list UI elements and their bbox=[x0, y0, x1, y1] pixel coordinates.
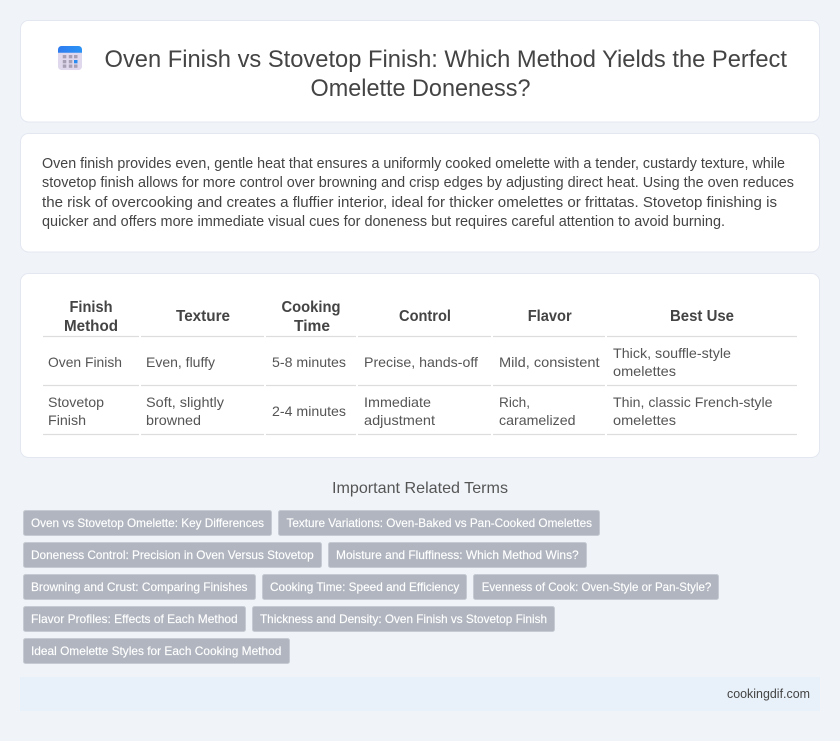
tag bbox=[24, 510, 272, 536]
tag bbox=[474, 574, 718, 600]
tag: Flavor Profiles: Effects of Each Method bbox=[31, 612, 238, 626]
tag: Browning and Crust: Comparing Finishes bbox=[31, 580, 248, 594]
title: Omelette Doneness? bbox=[310, 75, 530, 102]
table row: stovetop finish: Thin, classic French-style bbox=[613, 394, 773, 410]
tag: Texture Variations: Oven-Baked vs Pan-Cooked Omelettes bbox=[286, 516, 592, 530]
table row: stovetop finish: Rich, bbox=[499, 394, 530, 410]
panel: summary bbox=[20, 134, 820, 252]
table header: Flavor bbox=[528, 308, 572, 325]
table header: Time bbox=[294, 318, 330, 335]
table header: Cooking bbox=[282, 299, 340, 316]
tag: Oven vs Stovetop Omelette: Key Differences bbox=[31, 516, 264, 530]
footer bbox=[20, 677, 820, 711]
summary text: the risk of overcooking and creates a fluffier interior, ideal for thicker omelettes or frittatas. Stovetop finishing is bbox=[42, 195, 777, 211]
tag bbox=[24, 606, 246, 632]
table row: stovetop finish: omelettes bbox=[613, 412, 676, 428]
table row: stovetop finish bbox=[48, 394, 773, 428]
tag bbox=[278, 510, 600, 536]
summary text: Oven finish provides even, gentle heat that ensures a uniformly cooked omelette with a tender, custardy texture, while bbox=[42, 156, 785, 172]
table row: oven finish: Even, fluffy bbox=[146, 354, 215, 370]
table row: oven finish: Oven Finish bbox=[48, 354, 122, 370]
table row: stovetop finish: Immediate bbox=[364, 394, 431, 410]
tag: Moisture and Fluffiness: Which Method Wins? bbox=[336, 548, 579, 562]
title: Oven Finish vs Stovetop Finish: Which Method Yields the Perfect bbox=[104, 46, 787, 73]
table row: oven finish: Precise, hands-off bbox=[364, 354, 478, 370]
summary text bbox=[42, 156, 794, 230]
tag: Thickness and Density: Oven Finish vs Stovetop Finish bbox=[260, 612, 547, 626]
heading: related terms: Important Related Terms bbox=[332, 480, 508, 497]
table row: oven finish: omelettes bbox=[613, 363, 676, 379]
table row: stovetop finish: Soft, slightly bbox=[146, 394, 224, 410]
related term tags bbox=[24, 510, 718, 664]
table row: oven finish bbox=[48, 345, 731, 379]
table header: Texture bbox=[176, 308, 230, 325]
tag bbox=[24, 574, 256, 600]
tag: Cooking Time: Speed and Efficiency bbox=[270, 580, 459, 594]
table header bbox=[64, 299, 734, 335]
tag bbox=[252, 606, 554, 632]
table row: stovetop finish: Finish bbox=[48, 412, 86, 428]
table header: Method bbox=[64, 318, 118, 335]
table row: stovetop finish: adjustment bbox=[364, 412, 435, 428]
table row: stovetop finish: Stovetop bbox=[48, 394, 104, 410]
tag: Evenness of Cook: Oven-Style or Pan-Style? bbox=[482, 580, 712, 594]
tag: Ideal Omelette Styles for Each Cooking Method bbox=[31, 644, 281, 658]
table header: Control bbox=[399, 308, 451, 325]
table row: oven finish: Mild, consistent bbox=[499, 354, 600, 370]
table row: stovetop finish: browned bbox=[146, 412, 201, 428]
summary text: quicker and offers more immediate visual cues for doneness but requires careful attention to avoid burning. bbox=[42, 214, 725, 230]
panel: comparison table bbox=[20, 274, 820, 458]
tag bbox=[328, 542, 586, 568]
table row: oven finish: 5-8 minutes bbox=[272, 354, 346, 370]
tag bbox=[262, 574, 466, 600]
panel: title card bbox=[20, 20, 820, 122]
table row: stovetop finish: caramelized bbox=[499, 412, 576, 428]
table header: Finish bbox=[70, 299, 112, 316]
footer: cookingdif.com bbox=[727, 686, 810, 701]
title bbox=[104, 46, 787, 102]
tag: Doneness Control: Precision in Oven Versus Stovetop bbox=[31, 548, 314, 562]
icon: calendar bbox=[58, 46, 82, 70]
summary text: stovetop finish allows for more control over browning and crisp edges by adjusting direct heat. Using the oven reduces bbox=[42, 175, 794, 191]
tag bbox=[24, 638, 290, 664]
tag bbox=[24, 542, 322, 568]
table row: stovetop finish: 2-4 minutes bbox=[272, 403, 346, 419]
table header: Best Use bbox=[670, 308, 734, 325]
table row: oven finish: Thick, souffle-style bbox=[613, 345, 731, 361]
